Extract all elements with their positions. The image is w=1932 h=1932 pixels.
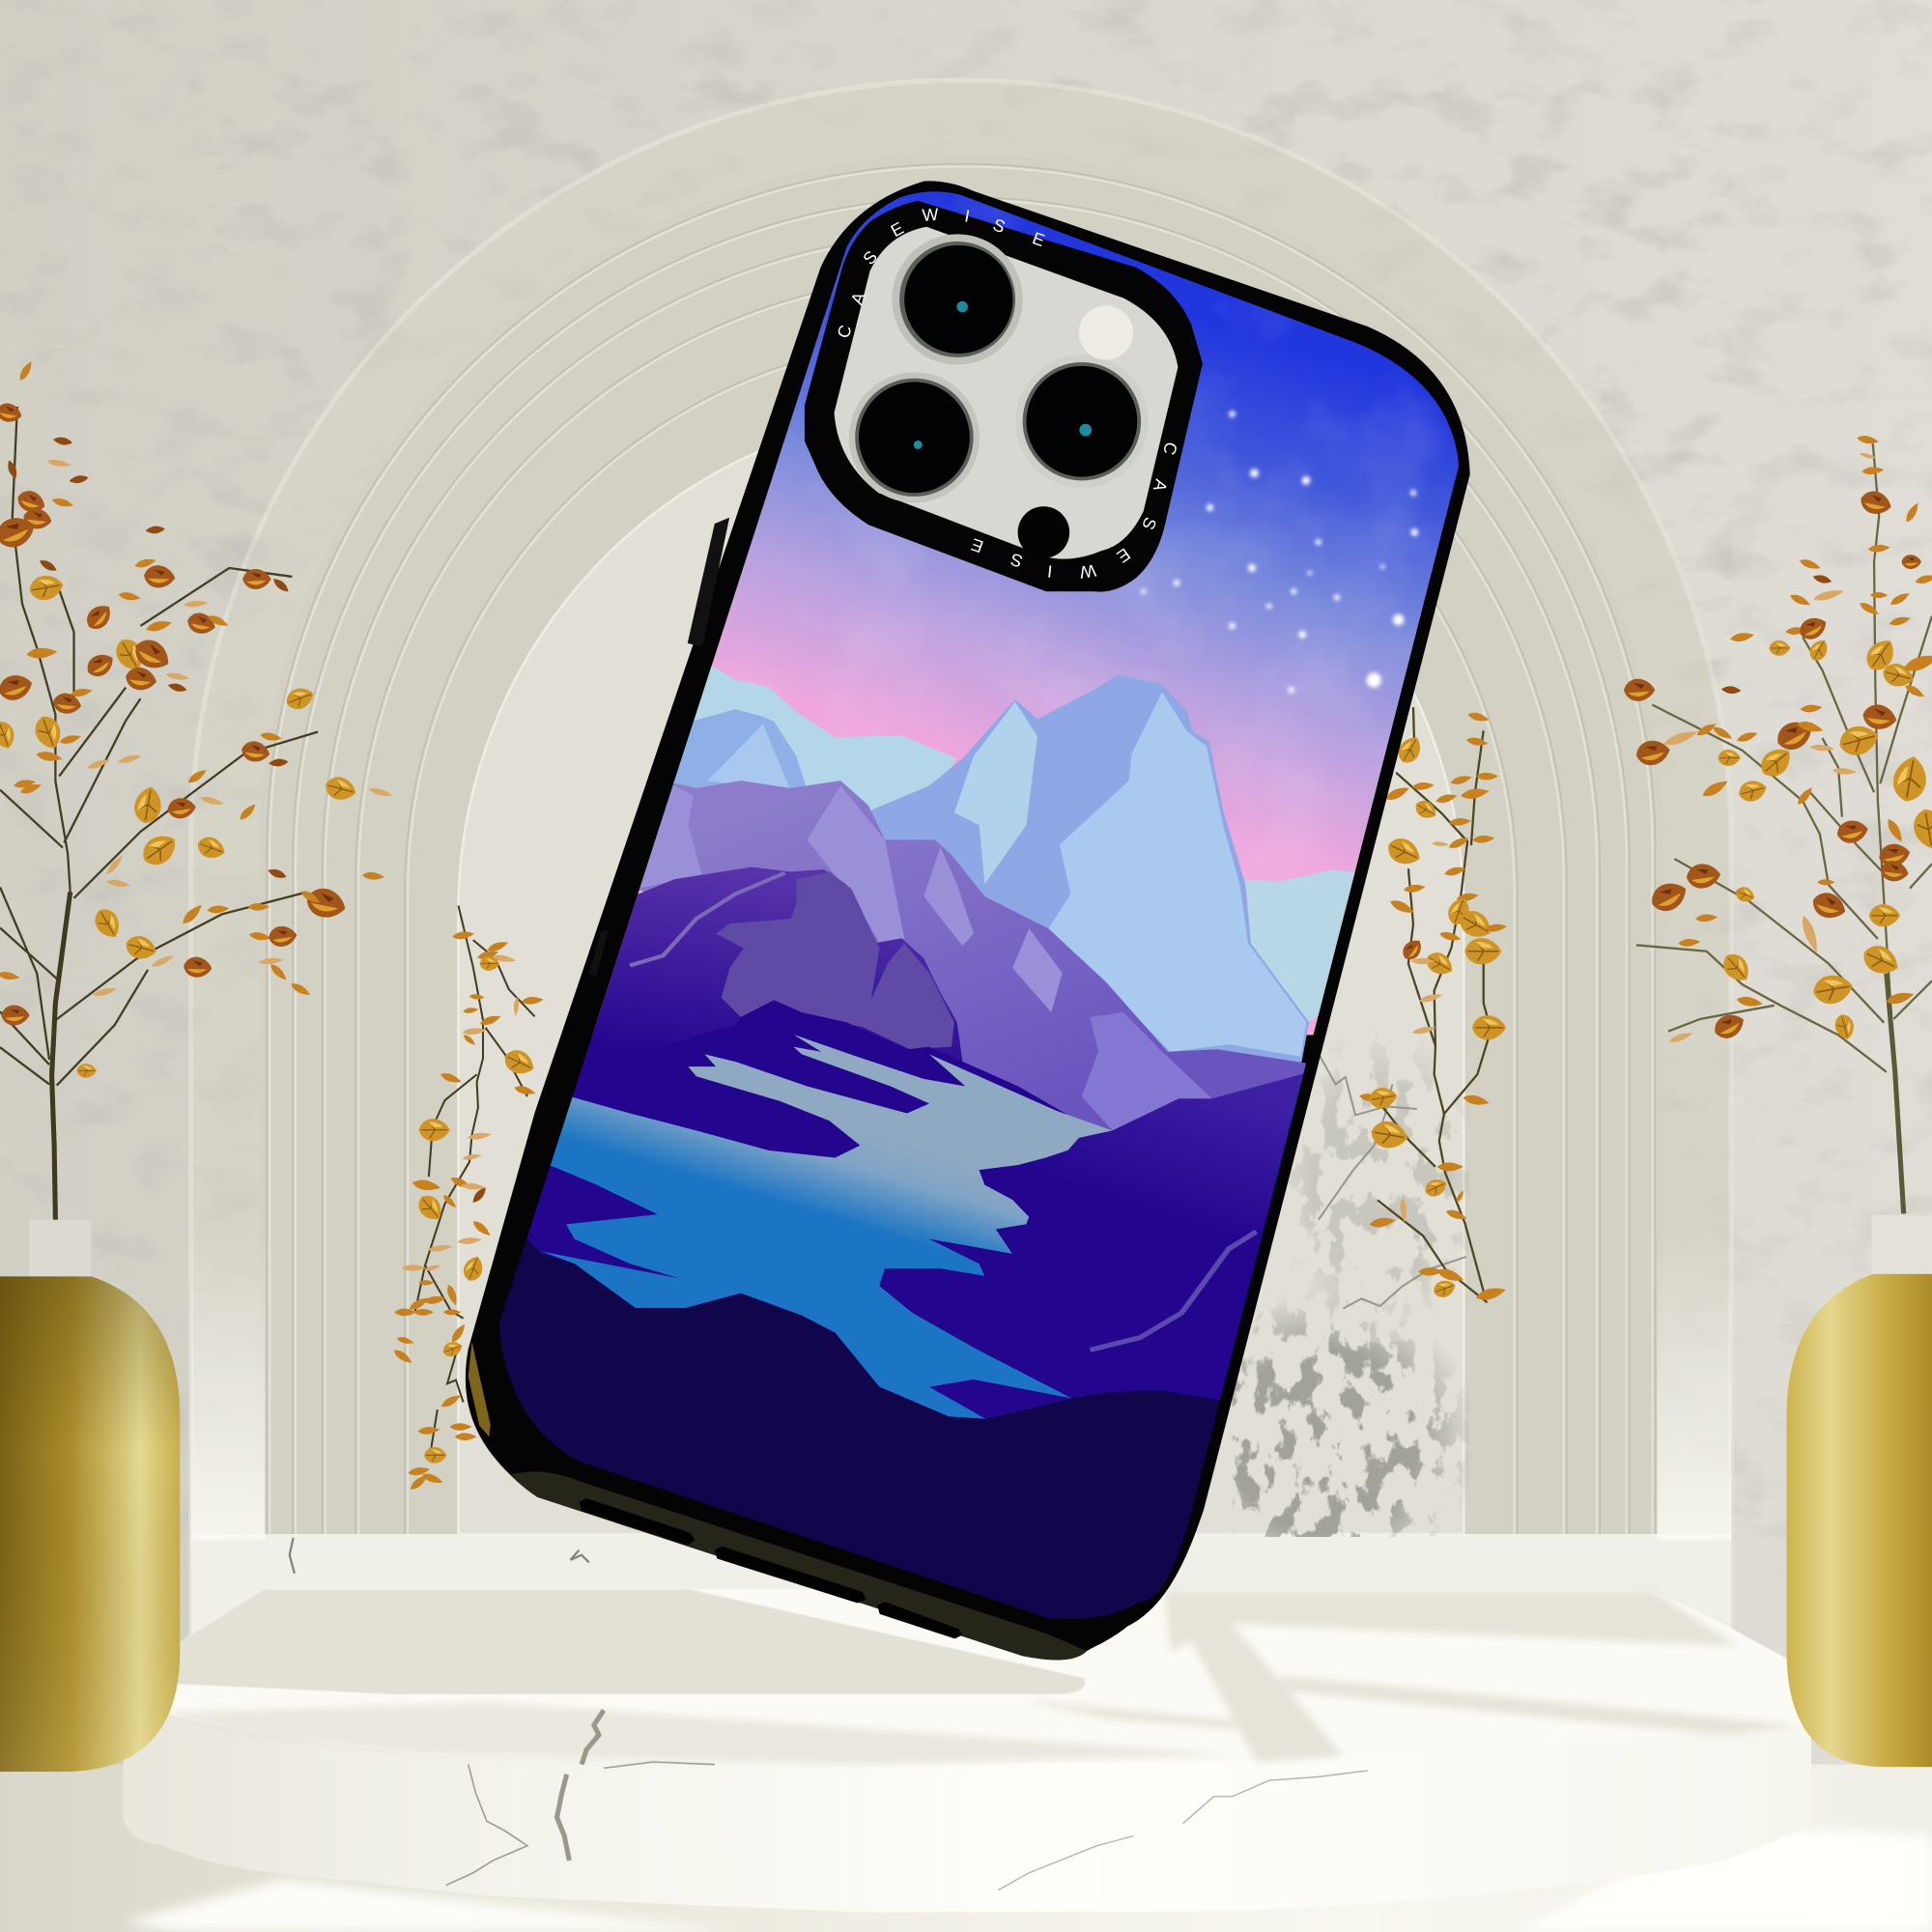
- screen artwork: [498, 191, 1459, 1619]
- pedestal front: [124, 1687, 1811, 1913]
- ring branding: A: [847, 289, 869, 307]
- gold reflection: [469, 1342, 491, 1436]
- small island: [929, 1379, 1072, 1419]
- pedestal: [0, 1589, 1932, 1932]
- flash: [1079, 305, 1133, 359]
- pale back range: [641, 665, 957, 855]
- purple mid range: [630, 781, 1312, 1141]
- branch: left tree: [0, 359, 393, 1220]
- niche opening: [458, 409, 1463, 1534]
- charging and speaker slots: [579, 1498, 962, 1638]
- branch: centre left vine: [391, 906, 544, 1492]
- right shore: [879, 1071, 1312, 1399]
- right pale ridge: [1245, 869, 1367, 1022]
- camera island: [805, 201, 1203, 592]
- lens top: [892, 234, 1023, 365]
- ring branding: I: [963, 206, 971, 226]
- ring branding: E: [969, 534, 986, 556]
- ring branding: I: [1046, 561, 1053, 582]
- left side buttons: [589, 518, 729, 976]
- deep indigo shore: [391, 1000, 1334, 1441]
- ring branding: [834, 205, 1181, 582]
- lens left: [849, 372, 980, 502]
- branch: centre right vine: [1358, 707, 1507, 1303]
- ring branding: E: [888, 218, 907, 241]
- lake: [535, 1035, 1112, 1419]
- ring branding: C: [834, 323, 856, 340]
- ring branding: W: [922, 205, 939, 225]
- lit lower wall: [191, 1534, 1731, 1645]
- marble veins on wall: [290, 1023, 1468, 1574]
- ring branding: S: [1009, 550, 1025, 571]
- right gold vase: [1786, 1215, 1932, 1767]
- dark foreground hills: [447, 1209, 1279, 1712]
- ring branding: C: [1159, 440, 1181, 457]
- marble veins on pedestal: [446, 1710, 1368, 1890]
- phone case: [391, 173, 1491, 1712]
- night sky: [592, 191, 1459, 1036]
- ring branding: S: [1138, 515, 1160, 532]
- ring branding: E: [1113, 544, 1134, 567]
- arch niche: [191, 80, 1731, 1645]
- ring branding: E: [1030, 228, 1047, 250]
- main peak: [871, 674, 1309, 1066]
- mountains and lake: [498, 666, 1354, 1619]
- ring branding: W: [1078, 560, 1097, 582]
- ring branding: S: [859, 247, 881, 269]
- stars: [1141, 411, 1418, 694]
- left gold vase: [0, 1220, 180, 1772]
- ring branding: S: [990, 214, 1008, 237]
- branch: right tree: [1624, 435, 1932, 1213]
- camera plate: [835, 227, 1178, 559]
- pedestal top surface: [124, 1589, 1811, 1765]
- lens right: [1015, 355, 1149, 488]
- lower case gloss: [510, 1471, 1087, 1660]
- dark purple foothill: [480, 867, 1112, 1170]
- phone shadow on pedestal: [135, 1589, 1085, 1694]
- shade bands on pedestal: [160, 1589, 1799, 1765]
- floor: [0, 1765, 1932, 1932]
- ring branding: A: [1150, 477, 1171, 494]
- lidar sensor: [1018, 506, 1069, 558]
- case body: [466, 181, 1470, 1660]
